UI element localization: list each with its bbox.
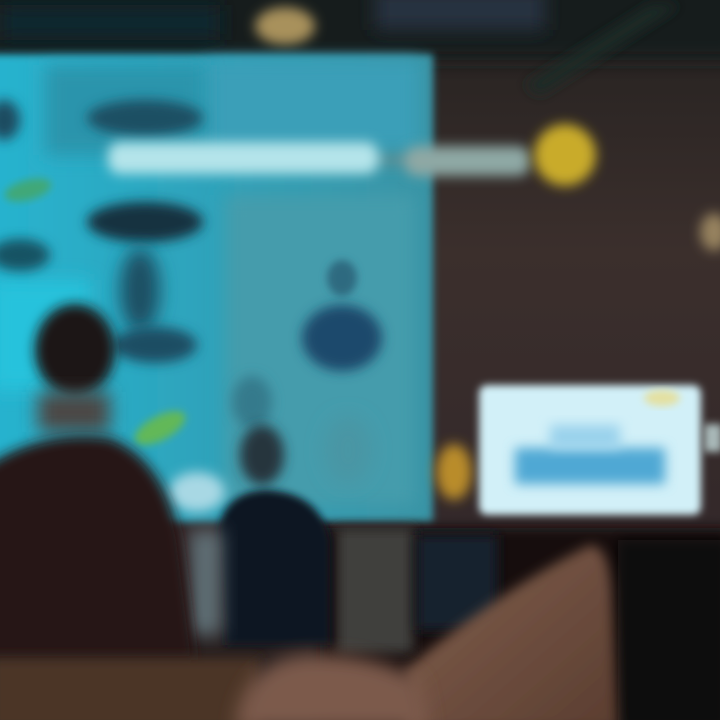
- white patch on screen: [169, 472, 225, 512]
- teal presentation screen: [0, 54, 433, 522]
- screen lower figures: [232, 376, 272, 428]
- orange light: [436, 444, 472, 500]
- screen portrait: [327, 260, 357, 296]
- presenter silhouette: [190, 425, 330, 645]
- foreground chair backs: [0, 545, 618, 720]
- screen panel: lighter centre column: [225, 195, 415, 505]
- ceiling: [0, 0, 720, 95]
- stage floor: [320, 528, 720, 720]
- blurred headline (illegible in reference): [108, 142, 530, 176]
- screen panel: bright left band: [0, 280, 90, 390]
- bright monitor: [479, 385, 720, 515]
- green accents: [2, 174, 54, 206]
- foreground attendee silhouette: [0, 304, 195, 660]
- right wall light: [700, 213, 720, 251]
- ceiling light: [255, 7, 315, 45]
- yellow badge: [534, 124, 596, 186]
- screen silhouettes: [87, 100, 203, 136]
